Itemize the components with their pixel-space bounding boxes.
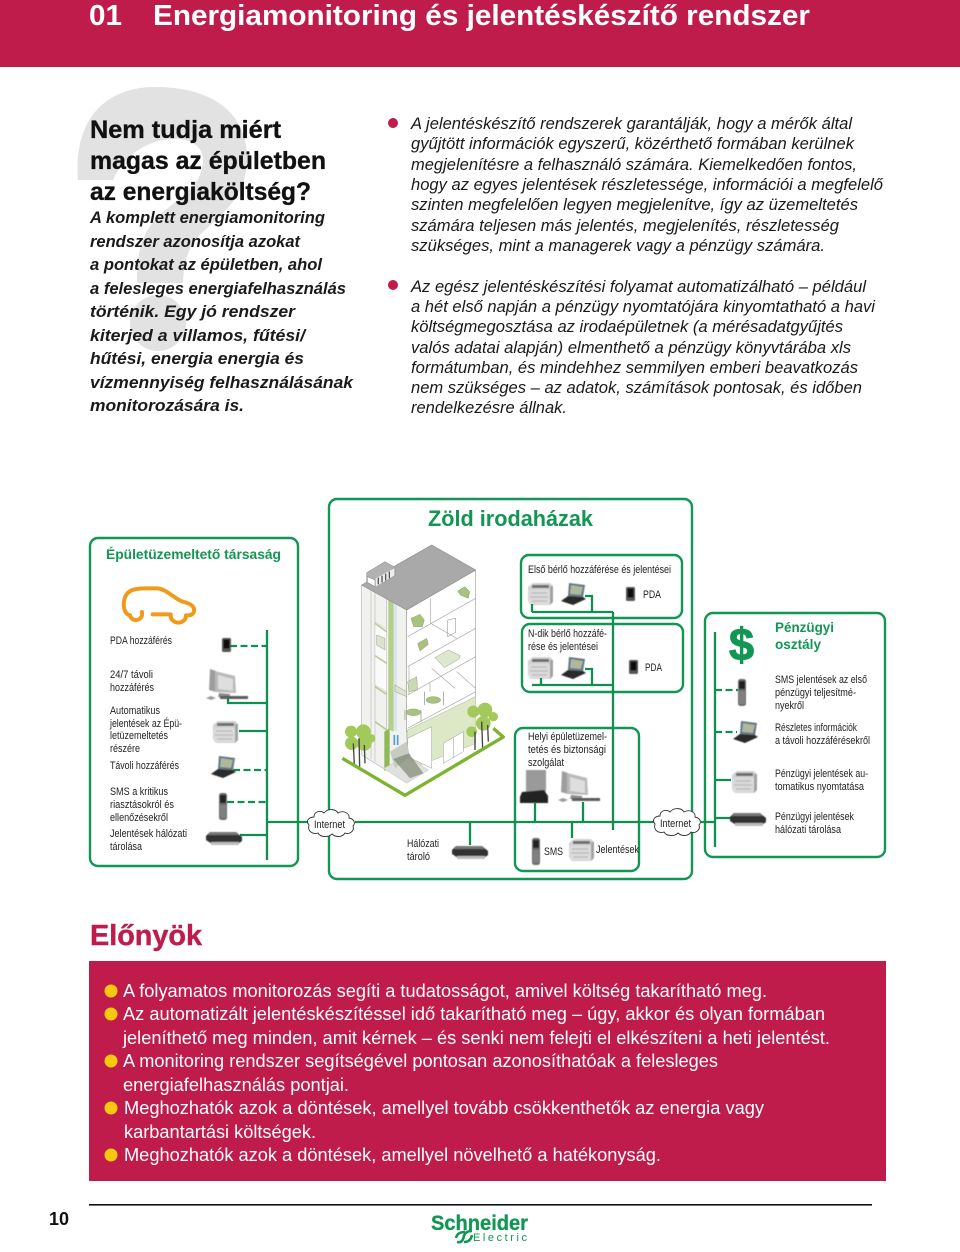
text block: automation: valós adatai alapján) elmenthető a pénzügy könyvtárába xls <box>411 339 851 357</box>
intro panel: question mark and text <box>77 87 355 415</box>
tenant box: n-th tenant <box>522 624 683 692</box>
device labels: tárolása <box>110 841 143 853</box>
logo: Schneider Electric <box>431 1212 528 1244</box>
benefits list: energiafelhasználás pontjai. <box>123 1075 349 1095</box>
device labels: SMS a kritikus <box>110 786 168 798</box>
device labels: hozzáférés <box>110 682 154 694</box>
device labels: Pénzügyi jelentések au- <box>775 768 868 780</box>
courtyard <box>383 757 428 783</box>
tenant heading: Első bérlő hozzáférése és jelentései <box>528 564 671 576</box>
green site outline <box>342 728 503 795</box>
local operations and security box <box>515 728 639 871</box>
benefits list: A folyamatos monitorozás segíti a tudatosságot, amivel költség takarítható meg. <box>123 981 767 1001</box>
device labels: Pénzügyi jelentések <box>775 811 854 823</box>
reports label: Jelentések <box>596 844 639 856</box>
device labels: részére <box>110 743 140 755</box>
furniture <box>377 587 470 716</box>
devices <box>206 638 248 845</box>
section number: 01 <box>89 0 122 32</box>
footer <box>49 1204 872 1244</box>
text block: automation: rendelkezésre állnak. <box>411 399 567 417</box>
heading: question: Nem tudja miért <box>90 116 282 144</box>
device labels: hálózati tárolása <box>775 824 842 836</box>
benefits list: Meghozhatók azok a döntések, amellyel tovább csökkenthetők az energia vagy <box>124 1098 764 1118</box>
device labels <box>775 674 870 836</box>
text block: reports: hogy az egyes jelentések részletessége, információi a megfelelő <box>411 176 884 194</box>
benefits list: A monitoring rendszer segítségével pontosan azonosíthatóak a felesleges <box>123 1051 718 1071</box>
page number: 10 <box>49 1209 69 1229</box>
benefits list: Meghozhatók azok a döntések, amellyel növelhető a hatékonyság. <box>124 1145 661 1165</box>
tenant heading: rése és jelentései <box>528 641 598 653</box>
bullet <box>388 118 398 128</box>
backbone and device connections <box>701 632 738 847</box>
intro paragraph: a pontokat az épületben, ahol <box>90 255 323 274</box>
text block: reports: szükséges, mint a managerek vagy a pénzügy számára. <box>411 237 825 255</box>
tenant heading <box>528 628 607 653</box>
right cut-away floors <box>407 570 476 732</box>
panel heading: Pénzügyi <box>775 620 834 635</box>
bullets <box>104 984 118 1162</box>
cloud: left internet <box>308 810 354 837</box>
text block: reports: számára teljesen más jelentés, megjelenítés, részletesség <box>411 217 840 235</box>
heading: question <box>90 116 326 206</box>
device labels: PDA hozzáférés <box>110 635 172 647</box>
device labels: Részletes információk <box>775 722 857 734</box>
box heading: szolgálat <box>528 757 564 769</box>
cloud label: Internet <box>314 819 345 831</box>
text block: reports <box>388 115 884 255</box>
PDA label: PDA <box>645 662 662 674</box>
box heading: tetés és biztonsági <box>528 744 606 756</box>
intro paragraph: A komplett energiamonitoring <box>89 208 326 227</box>
devices <box>528 583 635 605</box>
text block: reports: megjelenítésre a felhasználó számára. Kiemelkedően fontos, <box>411 156 857 174</box>
network diagram <box>90 499 885 879</box>
device labels: 24/7 távoli <box>110 669 153 681</box>
intro paragraph: rendszer azonosítja azokat <box>90 232 301 251</box>
devices <box>532 771 600 865</box>
text block: automation: a hét első napján a pénzügy nyomtatójára kinyomtatható a havi <box>411 298 876 316</box>
building network connections <box>355 596 655 845</box>
text block: automation: nem szükséges – az adatok, számítások pontosak, és időben <box>411 379 862 397</box>
box heading <box>528 731 607 769</box>
text block: reports: szinten megfelelően legyen megjelenítve, így az üzemeltetés <box>411 196 858 214</box>
panel: finance department <box>701 613 885 857</box>
device labels: riasztásokról és <box>110 799 174 811</box>
benefits list: karbantartási költségek. <box>124 1122 316 1142</box>
icon: network storage <box>452 846 488 859</box>
text block: automation: formátumban, és mindehhez semmilyen emberi beavatkozás <box>411 359 858 377</box>
intro paragraph: vízmennyiség felhasználásának <box>90 373 355 392</box>
tenant box: first tenant <box>521 555 682 618</box>
building illustration <box>342 545 503 795</box>
panel: benefits <box>89 961 886 1181</box>
icon: dollar sign: $ <box>729 619 754 670</box>
logo: Schneider Electric: Schneider <box>431 1212 528 1235</box>
text block: automation: Az egész jelentéskészítési folyamat automatizálható – például <box>410 278 867 296</box>
header banner <box>0 0 960 67</box>
backbone and device connections <box>227 630 310 860</box>
icon: large question mark <box>77 87 247 351</box>
SMS label: SMS <box>544 846 563 858</box>
intro paragraph: monitorozására is. <box>90 396 244 415</box>
green ground-floor wall <box>408 697 476 770</box>
device labels <box>109 635 187 853</box>
devices <box>528 657 638 679</box>
text block: reports: A jelentéskészítő rendszerek garantálják, hogy a mérők által <box>410 115 853 133</box>
roof <box>362 545 476 610</box>
device labels: a távoli hozzáférésekről <box>775 735 870 747</box>
text block: automation <box>388 278 876 417</box>
benefits list <box>122 981 830 1165</box>
device labels: SMS jelentések az első <box>775 674 867 686</box>
trees <box>345 703 498 751</box>
devices <box>730 679 766 826</box>
storage label: tároló <box>407 851 430 863</box>
device labels: tomatikus nyomtatása <box>775 781 865 793</box>
logo: Schneider Electric: Electric <box>473 1232 528 1244</box>
panel heading: Zöld irodaházak <box>428 506 594 531</box>
panel: green office buildings <box>329 499 692 879</box>
device labels: jelentések az Épü- <box>109 717 182 730</box>
device labels: Jelentések hálózati <box>110 828 187 840</box>
storage label: Hálózati <box>407 838 439 850</box>
heading: question: magas az épületben <box>90 147 326 175</box>
device labels: pénzügyi teljesítmé- <box>775 687 856 699</box>
benefits heading: Előnyök <box>90 920 203 952</box>
box heading: Helyi épületüzemel- <box>528 731 607 743</box>
cloud: right internet <box>654 809 700 836</box>
icon: car <box>124 588 194 623</box>
panel heading <box>775 620 834 652</box>
device labels: Automatikus <box>110 705 160 717</box>
intro paragraph: kiterjed a villamos, fűtési/ <box>90 326 307 345</box>
bullet <box>388 280 398 290</box>
panel: building operator <box>90 538 310 866</box>
benefits list: jeleníthető meg minden, amit kérnek – és senki nem felejti el elkészíteni a heti jelentést. <box>122 1028 830 1048</box>
icon: fax machine <box>520 770 548 803</box>
intro paragraph: a felesleges energiafelhasználás <box>90 279 346 298</box>
intro paragraph <box>89 208 355 415</box>
PDA label: PDA <box>643 589 662 601</box>
device labels: Távoli hozzáférés <box>110 760 179 772</box>
device labels: nyekről <box>775 700 804 712</box>
device labels: letüzemeltetés <box>110 730 168 742</box>
panel heading: osztály <box>775 637 821 652</box>
heading: question: az energiaköltség? <box>90 178 311 206</box>
intro paragraph: történik. Egy jó rendszer <box>90 302 296 321</box>
page title: Energiamonitoring és jelentéskészítő rendszer <box>153 0 810 32</box>
device labels: ellenőzésekről <box>110 812 168 824</box>
tenant heading: N-dik bérlő hozzáfé- <box>528 628 607 640</box>
cloud label: Internet <box>660 818 691 830</box>
text block: automation: költségmegosztása az irodaépületnek (a mérésadatgyűjtés <box>411 318 843 336</box>
panel heading: Épületüzemeltető társaság <box>106 546 281 562</box>
benefits list: Az automatizált jelentéskészítéssel idő takarítható meg – úgy, akkor és olyan formában <box>123 1004 825 1024</box>
left tower face <box>362 585 408 768</box>
text block: reports: gyűjtött információk egyszerű, közérthető formában kerülnek <box>411 135 855 153</box>
storage label <box>407 838 439 863</box>
intro paragraph: hűtési, energia energia és <box>90 349 304 368</box>
